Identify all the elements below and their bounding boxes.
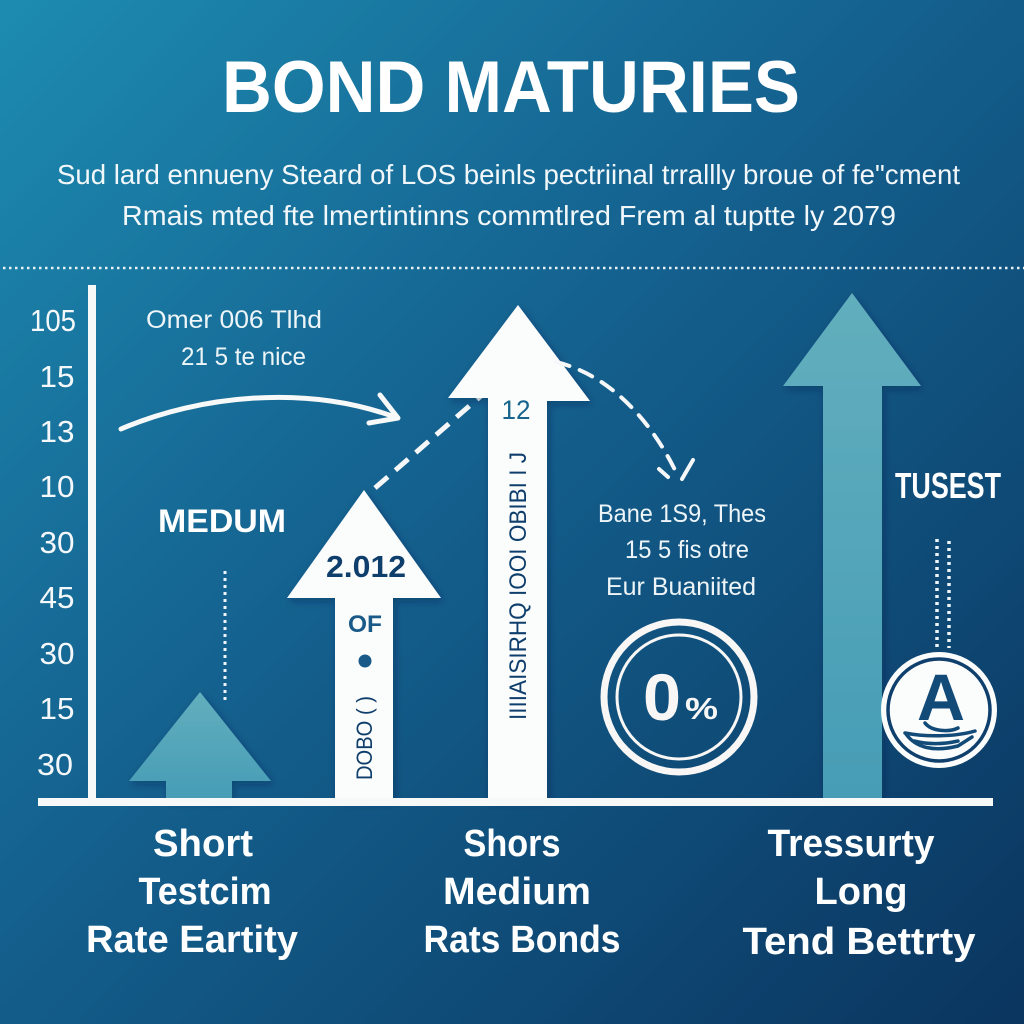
arrow: medium white with labels: 2.012 bbox=[326, 549, 406, 584]
arrow: medium white with labels bbox=[287, 490, 441, 800]
annotation: top left note bbox=[146, 306, 322, 371]
dotted connector: medium bbox=[224, 571, 226, 700]
arrow: tall white with labels bbox=[448, 305, 590, 800]
label: medium: MEDUM bbox=[158, 503, 286, 539]
subtitle text block bbox=[57, 159, 960, 231]
category label: treasury long: Tend Bettrty bbox=[742, 921, 976, 963]
y axis with scale labels: 13 bbox=[40, 414, 74, 449]
subtitle text block: Sud lard ennueny Steard of LOS beinls pectriinal trrallly broue of fe"cment bbox=[57, 159, 960, 190]
category label: short: Rate Eartity bbox=[86, 919, 298, 961]
y axis with scale labels: 30 bbox=[40, 525, 74, 560]
category label: treasury long bbox=[742, 823, 976, 963]
badge: letter A with hand bbox=[881, 652, 997, 768]
category label: short bbox=[86, 823, 298, 961]
annotation: right note bbox=[598, 500, 766, 601]
arrow: tall teal bbox=[783, 293, 921, 798]
subtitle text block: Rmais mted fte lmertintinns commtlred Frem al tuptte ly 2079 bbox=[122, 200, 896, 231]
y axis with scale labels: 15 bbox=[40, 691, 74, 726]
baseline axis bbox=[38, 798, 993, 806]
y axis with scale labels: 15 bbox=[40, 359, 74, 394]
badge: letter A with hand: A bbox=[917, 660, 965, 734]
category label: treasury long: Tressurty bbox=[768, 823, 934, 865]
y axis with scale labels: 105 bbox=[30, 303, 76, 338]
arrow: curved pointer to tall arrow bbox=[121, 395, 398, 429]
badge: zero percent: 0 bbox=[643, 660, 681, 734]
dashed connector between arrows bbox=[375, 395, 482, 488]
annotation: right note: Eur Buaniited bbox=[606, 573, 756, 601]
title: BOND MATURIES bbox=[222, 47, 800, 128]
category label: treasury long: Long bbox=[814, 871, 908, 913]
y axis with scale labels: 10 bbox=[40, 469, 74, 504]
annotation: right note: Bane 1S9, Thes bbox=[598, 500, 766, 528]
arrow: medium white with labels: OF bbox=[348, 611, 382, 638]
dashed curved arrow to note bbox=[556, 362, 693, 479]
arrow: tall white with labels: IIIIAISIRHQ IOOI OBIBI I J bbox=[505, 452, 532, 720]
arrow: tall white with labels: 12 bbox=[502, 395, 530, 425]
category label: short: Testcim bbox=[138, 871, 272, 913]
y axis with scale labels: 30 bbox=[40, 636, 74, 671]
badge: zero percent: % bbox=[685, 691, 718, 726]
y axis with scale labels: 30 bbox=[37, 747, 73, 782]
arrow: medium white with labels: DOBO ( ) bbox=[352, 696, 377, 780]
dotted connectors to badge bbox=[937, 539, 949, 648]
category label: short: Short bbox=[153, 823, 253, 865]
annotation: top left note: Omer 006 Tlhd bbox=[146, 306, 322, 334]
category label: medium: Rats Bonds bbox=[424, 919, 620, 961]
badge: zero percent bbox=[604, 622, 754, 772]
arrow: short teal bbox=[129, 692, 271, 800]
y axis with scale labels bbox=[30, 285, 96, 802]
annotation: top left note: 21 5 te nice bbox=[181, 343, 306, 371]
annotation: right note: 15 5 fis otre bbox=[625, 536, 749, 564]
category label: medium: Medium bbox=[443, 871, 591, 913]
category label: medium bbox=[424, 823, 620, 961]
category label: medium: Shors bbox=[464, 823, 560, 865]
y axis with scale labels: 45 bbox=[40, 580, 74, 615]
